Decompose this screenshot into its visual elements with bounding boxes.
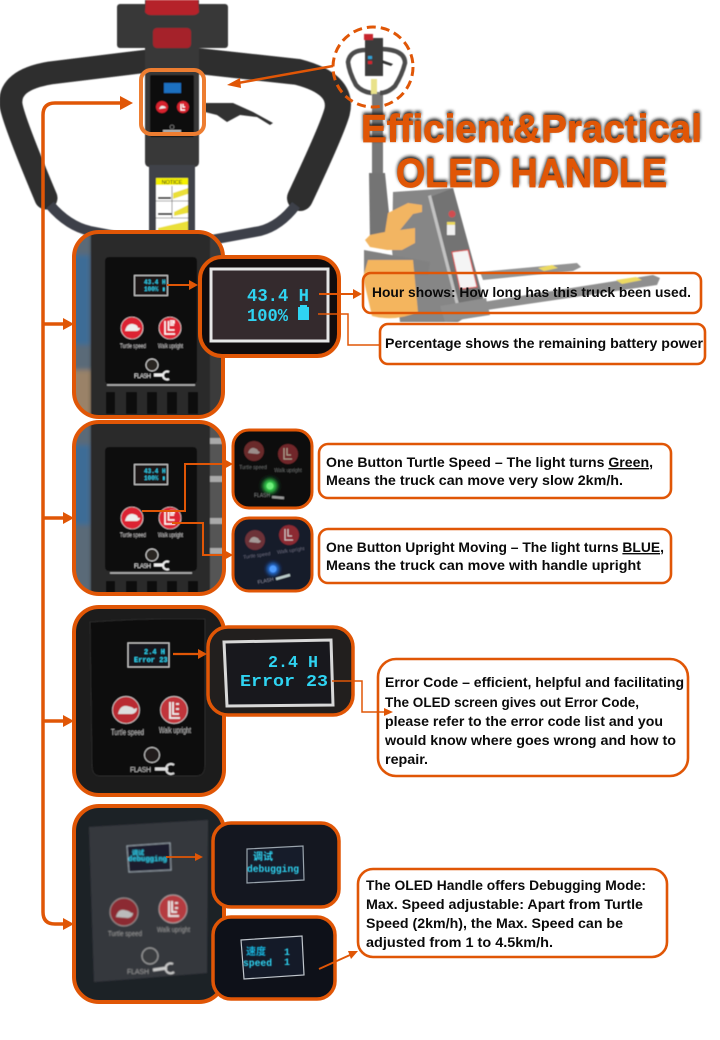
callout: error code: please refer to the error code list and you: [385, 713, 663, 729]
panel: green light photo: [233, 430, 312, 508]
callout: debugging mode: Speed (2km/h), the Max. Speed can be: [366, 915, 623, 931]
callout: hour shows: Hour shows: How long has this truck been used.: [372, 284, 691, 300]
panel: blue light photo: [233, 518, 312, 591]
panel: buttons control photo: Walk upright: [158, 533, 183, 539]
callout: error code: repair.: [385, 751, 428, 767]
panel: hour and battery control photo: Walk upright: [158, 344, 183, 350]
panel: hour and battery control photo: [68, 232, 223, 417]
panel: speed screen close-up: speed: [243, 958, 272, 970]
panel: speed screen close-up: 1: [284, 958, 290, 969]
callout: debugging mode: adjusted from 1 to 4.5km/h.: [366, 934, 553, 950]
panel: speed screen close-up: 1: [284, 948, 290, 959]
connector trunk from handle to panels: [43, 96, 133, 930]
panel: hour and battery control photo: Turtle speed: [120, 344, 146, 350]
panel: debugging control photo: Walk upright: [157, 925, 191, 934]
notice sticker: [156, 178, 188, 234]
notice sticker: NOTICE: [162, 180, 183, 186]
panel: buttons control photo: FLASH: [134, 564, 151, 570]
connector: button lines: [142, 459, 233, 560]
callout: turtle speed: [319, 444, 671, 498]
panel: blue light photo: FLASH: [257, 577, 275, 586]
panel: hour and battery control photo: 100% ▮: [144, 286, 166, 293]
panel: hour and battery control photo: FLASH: [134, 374, 151, 380]
connector: debugging arrows: [166, 853, 358, 969]
panel: error code close-up: 2.4 H: [268, 654, 318, 673]
panel: debugging control photo: 调试: [132, 848, 144, 857]
thumbnail handle with dashed circle: [333, 27, 413, 107]
panel: debugging control photo: [74, 806, 224, 1002]
panel: buttons control photo: 100% ▮: [144, 475, 166, 482]
callout: error code: [378, 659, 688, 776]
panel: debugging screen close-up: [213, 823, 339, 907]
panel: speed screen close-up: 速度: [246, 943, 266, 958]
callout: error code: would know where goes wrong and how to: [384, 732, 676, 748]
panel: error code control photo: Error 23: [134, 657, 168, 665]
callout: error code: The OLED screen gives out Error Code,: [385, 694, 639, 710]
panel: green light photo: Turtle speed: [239, 465, 267, 471]
panel: green light photo: Walk upright: [274, 468, 302, 474]
panel: debugging control photo: debugging: [128, 856, 167, 864]
title: [361, 106, 702, 196]
panel: blue light photo: Walk upright: [277, 546, 306, 556]
panel: error code close-up: [208, 627, 353, 715]
callout: hour shows: [363, 273, 701, 313]
callout: upright moving: Means the truck can move with handle upright: [326, 557, 641, 573]
pallet truck faded photo: [363, 92, 660, 322]
panel: OLED hour display close-up: [200, 257, 339, 356]
panel: debugging control photo: FLASH: [127, 969, 149, 976]
panel: error code control photo: Walk upright: [159, 726, 192, 735]
title: Efficient&Practical: [361, 108, 702, 151]
handle stem: [145, 0, 199, 167]
callout: upright moving: One Button Upright Moving – The light turns BLUE,: [326, 539, 664, 555]
callout: turtle speed: Means the truck can move very slow 2km/h.: [326, 472, 623, 488]
arrow from thumbnail to handle: [227, 66, 333, 88]
panel: buttons control photo: [68, 422, 224, 594]
panel: error code control photo: FLASH: [130, 767, 151, 774]
connector: hour display arrows: [167, 280, 379, 345]
panel: green light photo: FLASH: [254, 493, 271, 499]
panel: error code control photo: Turtle speed: [111, 728, 144, 737]
callout: percentage: [380, 324, 705, 364]
panel: speed screen close-up: [213, 917, 335, 999]
title: OLED HANDLE: [396, 148, 667, 194]
handle bar: [11, 61, 148, 198]
callout: debugging mode: Max. Speed adjustable: Apart from Turtle: [366, 896, 643, 912]
connector: error code arrows: [173, 649, 393, 716]
panel: error code control photo: [74, 607, 224, 795]
panel: blue light photo: Turtle speed: [243, 551, 271, 561]
panel: OLED hour display close-up: 100%: [247, 307, 288, 327]
panel: hour and battery control photo: 43.4 H: [144, 279, 166, 286]
panel: buttons control photo: Turtle speed: [120, 533, 146, 539]
title: Efficient&Practical: [361, 106, 702, 149]
callout: error code: Error Code – efficient, helpful and facilitating: [385, 674, 684, 690]
callout: debugging mode: [358, 869, 667, 957]
lever: [205, 103, 273, 125]
panel: debugging control photo: Turtle speed: [108, 929, 142, 938]
panel: error code control photo: 2.4 H: [144, 649, 165, 657]
panel: debugging screen close-up: 调试: [253, 848, 273, 863]
callout: debugging mode: The OLED Handle offers Debugging Mode:: [366, 877, 646, 893]
panel: error code close-up: Error 23: [240, 673, 328, 692]
title: OLED HANDLE: [396, 150, 667, 196]
callout: upright moving: [319, 529, 671, 583]
handle highlight frame: [141, 70, 204, 134]
callout: turtle speed: One Button Turtle Speed – The light turns Green,: [326, 454, 653, 470]
panel: debugging screen close-up: debugging: [247, 864, 299, 876]
callout: percentage: Percentage shows the remaining battery power: [385, 335, 704, 351]
display panel: [150, 75, 194, 137]
handle close-up photo: [11, 0, 338, 245]
panel: buttons control photo: 43.4 H: [144, 468, 166, 475]
panel: OLED hour display close-up: 43.4 H: [247, 287, 309, 307]
